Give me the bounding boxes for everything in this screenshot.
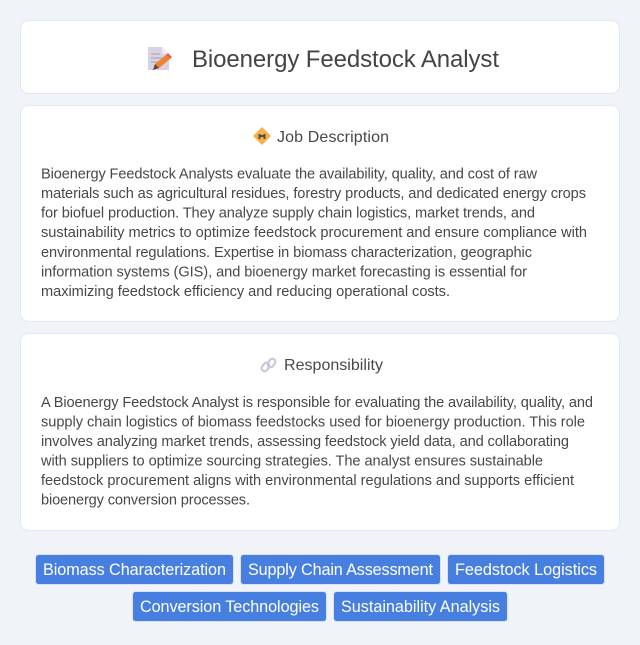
text block: job description: sustainability metrics to optimize feedstock procurement and ensure compliance with [41,225,587,241]
text block: responsibility: with suppliers to optimize sourcing strategies. The analyst ensures sustainable [40,454,543,470]
tag: supply chain assessment: Supply Chain Assessment [248,561,434,579]
text block: job description: information systems (GIS), and bioenergy market forecasting is essential for [41,264,527,280]
text block: job description [41,166,587,300]
panel: responsibility [20,334,620,530]
tag: feedstock logistics: Feedstock Logistics [455,561,597,579]
text block: job description: environmental regulations. Expertise in biomass characterization, geographic [41,245,532,261]
icon: orange diamond [254,128,270,144]
text block: responsibility: A Bioenergy Feedstock Analyst is responsible for evaluating the availability, quality, and [41,395,593,411]
tags [36,554,604,622]
panel: title [20,20,620,94]
panel: job description [20,106,620,322]
heading: responsibility: Responsibility [284,357,383,374]
text block: job description: maximizing feedstock efficiency and reducing operational costs. [41,284,450,300]
text block: responsibility: bioenergy conversion processes. [41,492,250,508]
text block: responsibility: involves analyzing market trends, assessing feedstock yield data, and collaborating [41,434,569,450]
tag: conversion technologies: Conversion Technologies [140,598,319,616]
text block: responsibility: supply chain logistics of biomass feedstocks used for bioenergy production. This role [41,414,585,430]
tag: supply chain assessment [240,554,440,584]
tag: conversion technologies [132,592,326,622]
title text: Bioenergy Feedstock Analyst [192,46,499,73]
text block: job description: for biofuel production. They analyze supply chain logistics, market trends, and [41,206,535,222]
tag: sustainability analysis [334,592,508,622]
text block: job description: materials such as agricultural residues, forestry products, and dedicated energy crops [41,186,586,202]
text block: job description: Bioenergy Feedstock Analysts evaluate the availability, quality, and cost of raw [41,166,537,182]
tag: biomass characterization [36,554,234,584]
text block: responsibility [40,395,593,508]
text block: responsibility: feedstock procurement aligns with environmental regulations and supports efficient [41,473,574,489]
tag: biomass characterization: Biomass Characterization [43,561,226,579]
tag: sustainability analysis: Sustainability Analysis [341,598,500,616]
tag: feedstock logistics [448,554,604,584]
icon: document with pencil [148,47,172,70]
heading: job description: Job Description [277,129,389,146]
icon: chain link [260,358,277,372]
